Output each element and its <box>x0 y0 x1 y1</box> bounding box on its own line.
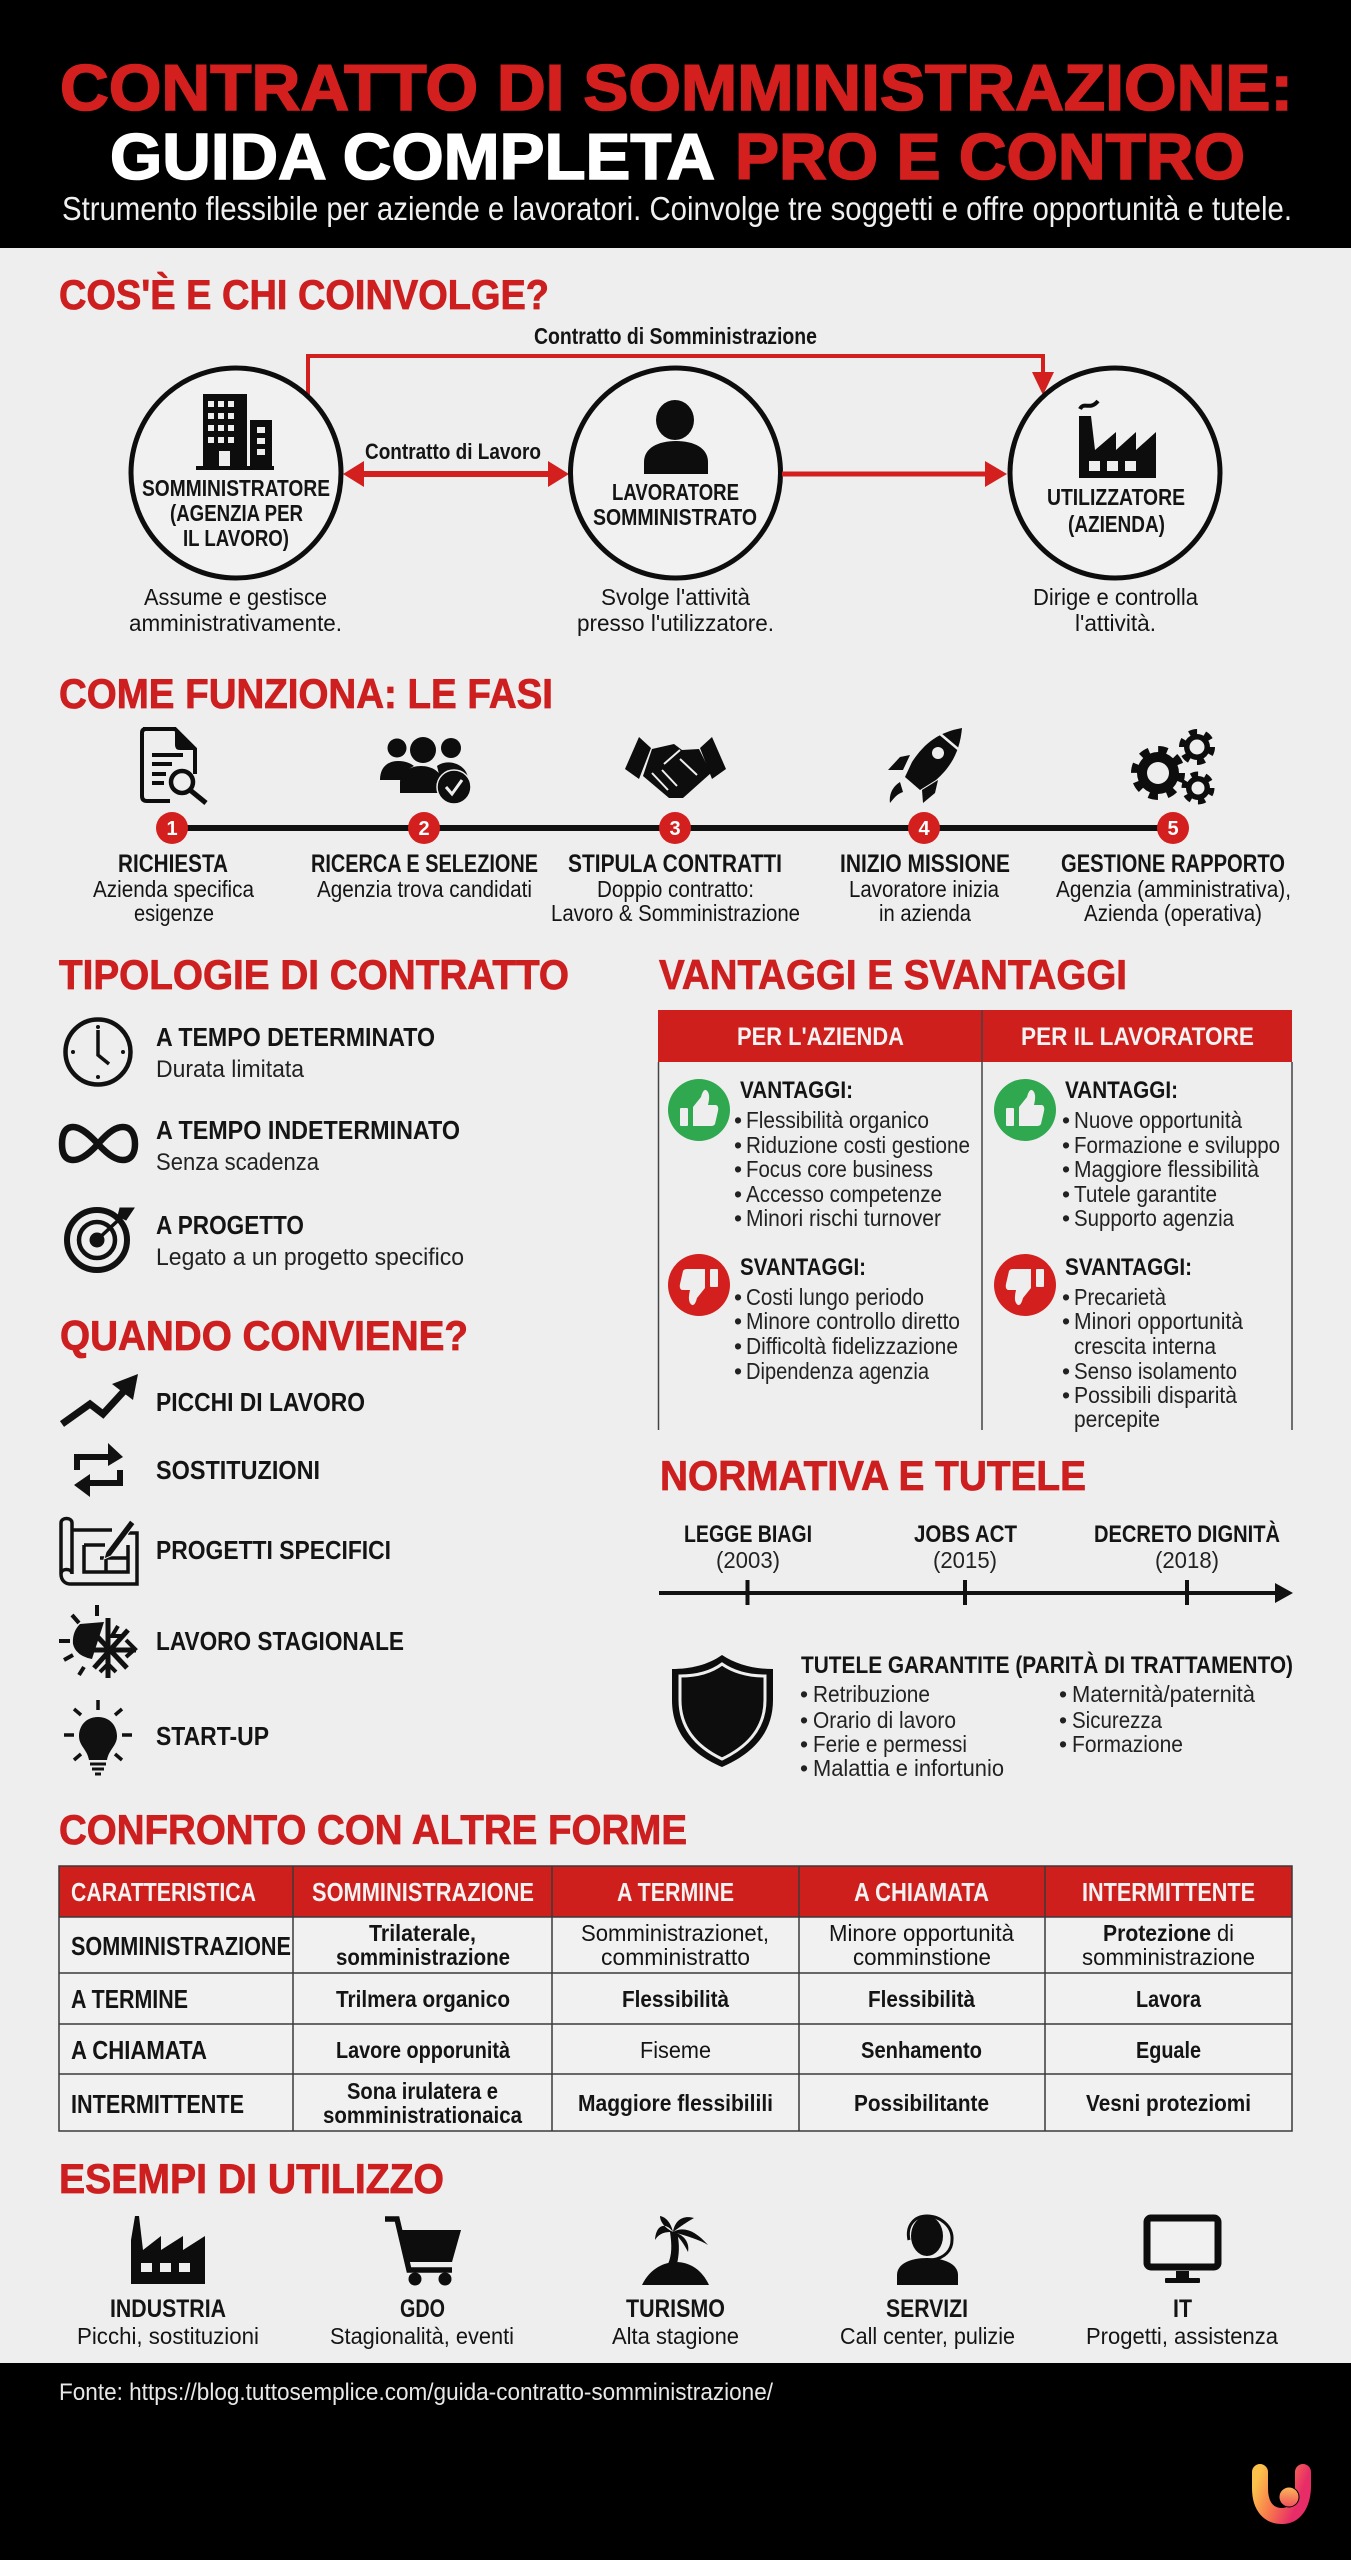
example: industria <box>77 2295 259 2349</box>
label: somministratore: SOMMINISTRATORE <box>142 475 330 501</box>
type: a progetto <box>156 1210 464 1271</box>
icon: infinity <box>62 1127 135 1160</box>
label: lavoratore somministrato: SOMMINISTRATO <box>593 504 757 530</box>
phase 3 text: STIPULA CONTRATTI <box>568 850 782 878</box>
caption: somministratore: amministrativamente. <box>129 610 342 636</box>
label: somministratore <box>142 475 330 551</box>
label: lavoratore somministrato: LAVORATORE <box>612 479 739 505</box>
title line 2: PRO E CONTRO <box>735 120 1245 193</box>
guarantees title: TUTELE GARANTITE (PARITÀ DI TRATTAMENTO) <box>801 1651 1293 1679</box>
worker advantages: • <box>1062 1132 1070 1158</box>
row: a chiamata <box>71 2035 1201 2065</box>
heading: CONFRONTO CON ALTRE FORME <box>59 1806 687 1853</box>
row: intermittente: somministrationaica <box>323 2102 522 2128</box>
row: a chiamata: Lavore opporunità <box>336 2037 510 2063</box>
icon: call center agent <box>897 2216 958 2285</box>
law: legge biagi <box>684 1521 812 1573</box>
type: tempo indeterminato: A TEMPO INDETERMINATO <box>156 1115 460 1145</box>
law: jobs act: JOBS ACT <box>914 1521 1017 1548</box>
label: utilizzatore: (AZIENDA) <box>1068 511 1165 537</box>
icon: building <box>196 394 274 470</box>
phase 5 text: Azienda (operativa) <box>1084 900 1262 926</box>
worker advantages: Formazione e sviluppo <box>1074 1132 1280 1158</box>
law: jobs act: (2015) <box>933 1547 997 1573</box>
company advantages: Focus core business <box>746 1156 933 1182</box>
heading: QUANDO CONVIENE? <box>60 1312 468 1359</box>
worker disadvantages: Minori opportunità <box>1074 1308 1243 1334</box>
icon: palm island <box>642 2216 709 2285</box>
table header row: A CHIAMATA <box>854 1877 989 1907</box>
circle: utilizzatore <box>1010 368 1220 578</box>
label: progetti specifici: PROGETTI SPECIFICI <box>156 1535 391 1565</box>
row: intermittente: Maggiore flessibilili <box>578 2090 773 2116</box>
company disadvantages: Costi lungo periodo <box>746 1284 924 1310</box>
label: contratto di lavoro: Contratto di Lavoro <box>365 439 541 464</box>
company disadvantages: SVANTAGGI: <box>740 1254 866 1281</box>
icon: document search <box>142 729 206 803</box>
label: utilizzatore <box>1047 484 1185 537</box>
section: tipologie di contratto <box>59 951 569 1271</box>
circle: lavoratore <box>570 368 780 578</box>
label: somministratore: (AGENZIA PER <box>170 500 303 526</box>
icon: thumb down worker <box>994 1254 1056 1316</box>
row: a chiamata: A CHIAMATA <box>71 2035 207 2065</box>
worker disadvantages: Possibili disparità <box>1074 1382 1237 1408</box>
timeline arrow <box>659 1580 1293 1605</box>
icon: thumb up company <box>668 1079 730 1141</box>
icon: swap arrows <box>74 1443 123 1497</box>
guarantees list right: • <box>1059 1731 1067 1757</box>
row: intermittente: INTERMITTENTE <box>71 2089 244 2119</box>
phase 5 text: Agenzia (amministrativa), <box>1056 876 1291 902</box>
table header row: SOMMINISTRAZIONE <box>312 1877 534 1907</box>
table header: PER IL LAVORATORE <box>1021 1023 1254 1051</box>
phase 4 text: INIZIO MISSIONE <box>840 850 1010 878</box>
step 3: 3 <box>669 818 681 840</box>
comparison table <box>59 1866 1292 2131</box>
worker advantages: • <box>1062 1156 1070 1182</box>
circle: somministratore <box>131 368 341 578</box>
caption: utilizzatore: Dirige e controlla <box>1033 584 1198 610</box>
worker disadvantages: • <box>1062 1382 1070 1408</box>
company disadvantages <box>734 1254 960 1384</box>
heading: NORMATIVA E TUTELE <box>660 1452 1086 1499</box>
example: it: Progetti, assistenza <box>1086 2323 1278 2349</box>
icon: gears <box>1135 732 1212 802</box>
row: a termine: Flessibilità <box>868 1986 975 2012</box>
row: intermittente: Vesni proteziomi <box>1086 2090 1251 2116</box>
label: sostituzioni: SOSTITUZIONI <box>156 1455 320 1485</box>
guarantees list left: Malattia e infortunio <box>813 1755 1004 1781</box>
heading: ESEMPI DI UTILIZZO <box>59 2155 444 2202</box>
guarantees list left <box>800 1681 1004 1781</box>
label: start-up: START-UP <box>156 1721 269 1751</box>
company advantages: Flessibilità organico <box>746 1107 929 1133</box>
row: somministrazione <box>71 1920 1255 1970</box>
icon: cart <box>385 2219 461 2286</box>
row: a termine: Trilmera organico <box>336 1986 510 2012</box>
example: it <box>1086 2295 1278 2349</box>
law: legge biagi: (2003) <box>716 1547 780 1573</box>
law: decreto dignità: DECRETO DIGNITÀ <box>1094 1520 1280 1548</box>
icon: shield <box>672 1655 773 1767</box>
title line 2: GUIDA COMPLETA <box>110 120 715 193</box>
worker disadvantages: • <box>1062 1308 1070 1334</box>
row: a termine: Flessibilità <box>622 1986 729 2012</box>
guarantees list right <box>1059 1681 1255 1757</box>
heading: COME FUNZIONA: LE FASI <box>59 670 553 717</box>
heading: COS'È E CHI COINVOLGE? <box>59 271 549 318</box>
worker advantages: • <box>1062 1107 1070 1133</box>
example: industria: Picchi, sostituzioni <box>77 2323 259 2349</box>
worker advantages: VANTAGGI: <box>1065 1077 1178 1104</box>
company advantages: VANTAGGI: <box>740 1077 853 1104</box>
source link text: Fonte: https://blog.tuttosemplice.com/guida-contratto-somministrazione/ <box>59 2379 773 2406</box>
step 5 <box>1157 812 1189 844</box>
worker advantages: Nuove opportunità <box>1074 1107 1242 1133</box>
step 2 <box>408 812 440 844</box>
caption: somministratore <box>129 584 342 636</box>
caption: lavoratore: Svolge l'attività <box>601 584 750 610</box>
caption: lavoratore <box>577 584 774 636</box>
example: industria: INDUSTRIA <box>110 2295 226 2323</box>
row: a termine: A TERMINE <box>71 1984 188 2014</box>
icon: thumb up worker <box>994 1079 1056 1141</box>
phase 2 text <box>311 850 538 902</box>
guarantees list right: Sicurezza <box>1072 1707 1162 1733</box>
company advantages: • <box>734 1181 742 1207</box>
table header <box>658 1010 1292 1062</box>
caption: lavoratore: presso l'utilizzatore. <box>577 610 774 636</box>
label: somministratore: IL LAVORO) <box>183 525 289 551</box>
row: a chiamata: Eguale <box>1136 2037 1201 2063</box>
heading: TIPOLOGIE DI CONTRATTO <box>59 951 569 998</box>
company advantages: • <box>734 1107 742 1133</box>
guarantees list left: • <box>800 1755 808 1781</box>
logo <box>1260 2472 1303 2516</box>
worker advantages: • <box>1062 1205 1070 1231</box>
type: tempo determinato <box>156 1022 435 1083</box>
type: a progetto: Legato a un progetto specifico <box>156 1244 464 1271</box>
table header: PER L'AZIENDA <box>737 1023 904 1051</box>
law: decreto dignità <box>1094 1520 1280 1573</box>
section: cos'è e chi coinvolge <box>59 271 1220 636</box>
company advantages: Accesso competenze <box>746 1181 942 1207</box>
company disadvantages: Dipendenza agenzia <box>746 1358 929 1384</box>
icon: target <box>67 1208 134 1270</box>
guarantees list left: • <box>800 1681 808 1707</box>
icon: light bulb <box>64 1700 132 1774</box>
phase 5 text <box>1056 850 1291 926</box>
law: jobs act <box>914 1521 1017 1573</box>
company advantages: Riduzione costi gestione <box>746 1132 970 1158</box>
step 3 <box>659 812 691 844</box>
company disadvantages: • <box>734 1333 742 1359</box>
table header row: A TERMINE <box>617 1877 734 1907</box>
worker advantages: • <box>1062 1181 1070 1207</box>
guarantees list right: • <box>1059 1707 1067 1733</box>
type: tempo indeterminato: Senza scadenza <box>156 1149 320 1176</box>
guarantees list left: • <box>800 1707 808 1733</box>
row: intermittente <box>71 2078 1251 2128</box>
title line 2 <box>110 120 1245 193</box>
step 1: 1 <box>166 818 178 840</box>
icon: clock <box>66 1020 130 1084</box>
example: gdo: Stagionalità, eventi <box>330 2323 514 2349</box>
guarantees list left: • <box>800 1731 808 1757</box>
example: turismo <box>612 2295 739 2349</box>
company disadvantages: • <box>734 1284 742 1310</box>
phase 1 text: esigenze <box>134 900 214 926</box>
icon: rising chart <box>62 1374 138 1424</box>
step 4: 4 <box>918 818 930 840</box>
section: normativa e tutele <box>659 1452 1293 1781</box>
company advantages: Minori rischi turnover <box>746 1205 941 1231</box>
phase 2 text: Agenzia trova candidati <box>317 876 532 902</box>
phase 3 text: Lavoro & Somministrazione <box>551 900 800 926</box>
row: intermittente: Sona irulatera e <box>347 2078 498 2104</box>
worker disadvantages <box>1062 1254 1243 1432</box>
company disadvantages: Minore controllo diretto <box>746 1308 960 1334</box>
label: utilizzatore: UTILIZZATORE <box>1047 484 1185 510</box>
row: somministrazione: Minore opportunità <box>829 1920 1014 1946</box>
worker advantages <box>1062 1077 1280 1231</box>
icon: factory industry <box>131 2216 205 2284</box>
row: somministrazione: Protezione <box>1103 1920 1211 1946</box>
phase 1 text <box>93 850 254 926</box>
row: somministrazione: di <box>1217 1920 1234 1946</box>
arrow: lavoratore to utilizzatore <box>782 461 1007 487</box>
worker disadvantages: Senso isolamento <box>1074 1358 1237 1384</box>
icon: blueprint <box>61 1518 137 1584</box>
icon: rocket <box>888 728 962 803</box>
step 2: 2 <box>418 818 430 840</box>
table header row: INTERMITTENTE <box>1082 1877 1255 1907</box>
phase 3 text <box>551 850 800 926</box>
timeline with numbered steps <box>156 812 1189 844</box>
icon: handshake <box>625 737 726 798</box>
phase 5 text: GESTIONE RAPPORTO <box>1061 850 1285 878</box>
guarantees list right: • <box>1059 1681 1067 1707</box>
type: a progetto: A PROGETTO <box>156 1210 304 1240</box>
guarantees list left: Orario di lavoro <box>813 1707 956 1733</box>
worker disadvantages: crescita interna <box>1074 1333 1216 1359</box>
law: decreto dignità: (2018) <box>1155 1547 1219 1573</box>
worker disadvantages: Precarietà <box>1074 1284 1166 1310</box>
company advantages: • <box>734 1132 742 1158</box>
worker disadvantages: • <box>1062 1358 1070 1384</box>
section: esempi di utilizzo <box>59 2155 1278 2349</box>
icon: factory <box>1079 401 1156 478</box>
company disadvantages: • <box>734 1358 742 1384</box>
type: tempo indeterminato <box>156 1115 460 1176</box>
phase 3 text: Doppio contratto: <box>597 876 754 902</box>
section: confronto <box>59 1806 1292 2131</box>
phase 4 text: in azienda <box>879 900 971 926</box>
row: a chiamata: Senhamento <box>861 2037 982 2063</box>
section: quando conviene <box>59 1312 468 1774</box>
example: it: IT <box>1173 2295 1192 2323</box>
guarantees list right: Maternità/paternità <box>1072 1681 1255 1707</box>
row: somministrazione: comministratto <box>601 1944 750 1970</box>
worker advantages: Tutele garantite <box>1074 1181 1217 1207</box>
caption: somministratore: Assume e gestisce <box>144 584 327 610</box>
icon: sun and snowflake <box>59 1605 136 1678</box>
row: a termine: Lavora <box>1136 1986 1201 2012</box>
footer band <box>0 2363 1351 2560</box>
worker disadvantages: percepite <box>1074 1406 1160 1432</box>
table header row: CARATTERISTICA <box>71 1877 256 1907</box>
example: gdo <box>330 2295 514 2349</box>
table header row <box>71 1877 1255 1907</box>
guarantees list left: Retribuzione <box>813 1681 930 1707</box>
icon: people <box>380 737 471 804</box>
row: intermittente: Possibilitante <box>854 2090 989 2116</box>
step 4 <box>908 812 940 844</box>
example: servizi: Call center, pulizie <box>840 2323 1015 2349</box>
company disadvantages: Difficoltà fidelizzazione <box>746 1333 958 1359</box>
label: lavoro stagionale: LAVORO STAGIONALE <box>156 1626 404 1656</box>
caption: utilizzatore <box>1033 584 1198 636</box>
worker disadvantages: SVANTAGGI: <box>1065 1254 1192 1281</box>
phase 1 text: RICHIESTA <box>118 850 228 878</box>
row: somministrazione: Somministrazionet, <box>581 1920 769 1946</box>
phase 4 text <box>840 850 1010 926</box>
phase 4 text: Lavoratore inizia <box>849 876 999 902</box>
icon: monitor <box>1147 2218 1218 2283</box>
step 5: 5 <box>1167 818 1179 840</box>
company advantages: • <box>734 1205 742 1231</box>
label: picchi di lavoro: PICCHI DI LAVORO <box>156 1387 365 1417</box>
type: tempo determinato: A TEMPO DETERMINATO <box>156 1022 435 1052</box>
arrow: contratto di lavoro <box>343 461 569 487</box>
row: somministrazione: somministrazione <box>336 1944 510 1970</box>
worker disadvantages: • <box>1062 1284 1070 1310</box>
phase 2 text: RICERCA E SELEZIONE <box>311 850 538 878</box>
example: gdo: GDO <box>400 2295 445 2323</box>
row: somministrazione: Trilaterale, <box>369 1920 476 1946</box>
phase 1 text: Azienda specifica <box>93 876 254 902</box>
example: servizi: SERVIZI <box>886 2295 968 2323</box>
example: servizi <box>840 2295 1015 2349</box>
company advantages: • <box>734 1156 742 1182</box>
example: turismo: TURISMO <box>626 2295 725 2323</box>
arrow: somministrazione <box>308 356 1054 396</box>
heading: VANTAGGI E SVANTAGGI <box>659 951 1127 998</box>
caption: utilizzatore: l'attività. <box>1075 610 1156 636</box>
worker advantages: Supporto agenzia <box>1074 1205 1234 1231</box>
header band <box>0 0 1351 248</box>
type: tempo determinato: Durata limitata <box>156 1056 305 1083</box>
section: vantaggi e svantaggi <box>658 951 1292 1432</box>
step 1 <box>156 812 188 844</box>
law: legge biagi: LEGGE BIAGI <box>684 1521 812 1548</box>
icon: person <box>644 400 708 474</box>
row: a chiamata: Fiseme <box>640 2037 711 2063</box>
row: somministrazione: comminstione <box>853 1944 991 1970</box>
worker advantages: Maggiore flessibilità <box>1074 1156 1259 1182</box>
row: somministrazione: SOMMINISTRAZIONE <box>71 1931 291 1961</box>
company advantages <box>734 1077 970 1231</box>
guarantees list right: Formazione <box>1072 1731 1183 1757</box>
row: a termine <box>71 1984 1201 2014</box>
label: lavoratore somministrato <box>593 479 757 530</box>
section: come funziona <box>59 670 1291 926</box>
icon: thumb down company <box>668 1254 730 1316</box>
title line 1: CONTRATTO DI SOMMINISTRAZIONE: <box>60 51 1293 124</box>
row: somministrazione: somministrazione <box>1082 1944 1255 1970</box>
company disadvantages: • <box>734 1308 742 1334</box>
example: turismo: Alta stagione <box>612 2323 739 2349</box>
label: contratto di somministrazione: Contratto di Somministrazione <box>534 323 817 349</box>
guarantees list left: Ferie e permessi <box>813 1731 967 1757</box>
